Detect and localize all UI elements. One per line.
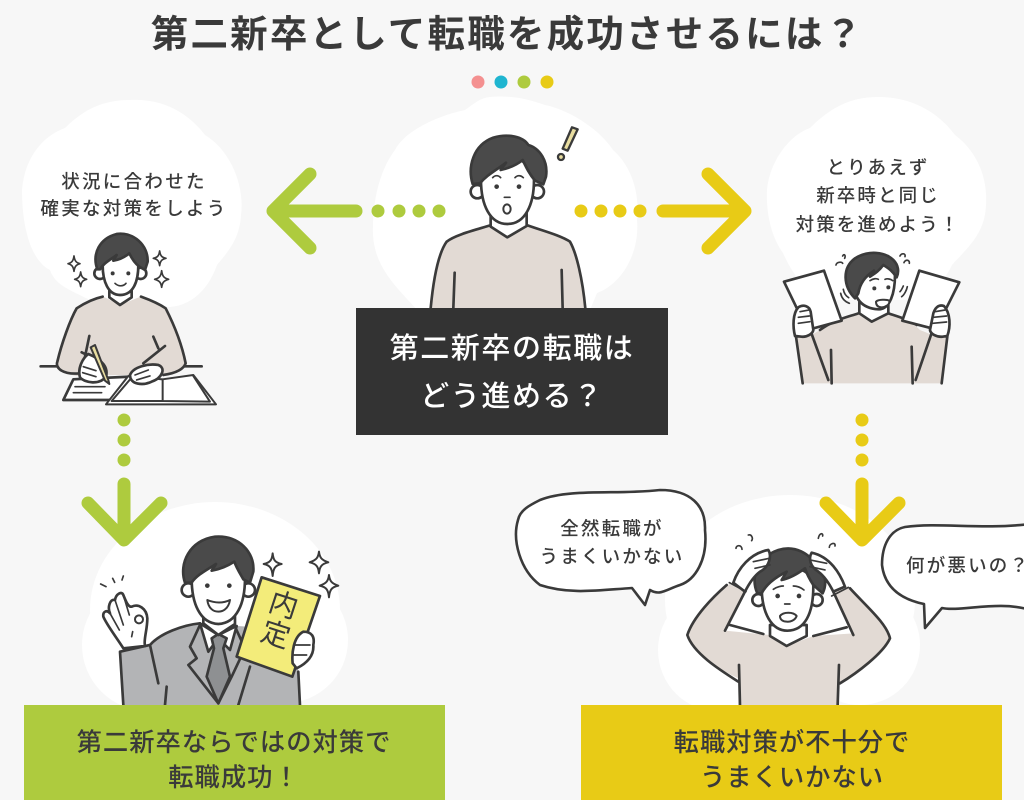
conclusion box: success: 転職成功！	[168, 764, 300, 792]
icon: exclamation mark	[558, 127, 578, 160]
cloud: center	[373, 97, 638, 310]
heading box: center question: どう進める？	[420, 380, 604, 413]
left downward dotted connector	[118, 414, 130, 466]
heading box: center question: 第二新卒の転職は	[390, 332, 634, 365]
speech bubble: left: うまくいかない	[540, 546, 684, 567]
conclusion box: failure: うまくいかない	[700, 764, 884, 792]
cloud: bottom left	[82, 502, 348, 718]
person: bottom right holding head	[687, 534, 890, 705]
heading box: center question	[356, 308, 668, 435]
person: bottom left with job offer	[101, 537, 338, 705]
text: left thought: 確実な対策をしよう	[40, 198, 228, 219]
icon: sparkles	[264, 552, 338, 597]
icon: OK hand	[101, 576, 147, 648]
arrow: down left	[88, 484, 161, 540]
cloud: bottom right	[658, 495, 920, 712]
title accent dots	[472, 76, 554, 88]
person: right panicking with papers	[784, 253, 959, 383]
cloud: right	[767, 97, 986, 300]
arrow: to left	[273, 174, 356, 248]
paper: job offer	[237, 577, 320, 677]
left dotted connector	[372, 204, 446, 218]
conclusion box: failure: 転職対策が不十分で	[674, 729, 910, 757]
speech bubble: left	[516, 490, 705, 605]
right dotted connector	[574, 204, 646, 218]
person: center surprised	[431, 127, 585, 308]
conclusion box: success	[24, 705, 445, 800]
arrow: down right	[826, 484, 899, 540]
title: 第二新卒として転職を成功させるには？	[151, 13, 864, 55]
text: right thought: 対策を進めよう！	[796, 214, 960, 235]
text: right thought: 新卒時と同じ	[816, 185, 940, 206]
conclusion box: success: 第二新卒ならではの対策で	[77, 729, 391, 757]
speech bubble: left: 全然転職が	[560, 518, 664, 539]
text: left thought	[40, 171, 228, 219]
paper: job offer: 定	[257, 616, 294, 655]
paper: job offer: 内	[265, 586, 302, 625]
right downward dotted connector	[856, 414, 868, 466]
icon: sparkles	[68, 251, 169, 287]
conclusion box: failure	[581, 705, 1002, 800]
text: right thought: とりあえず	[826, 157, 930, 178]
arrow: to right	[663, 174, 745, 248]
speech bubble: right	[882, 524, 1024, 628]
text: left thought: 状況に合わせた	[61, 171, 207, 192]
person: left studying at desk	[41, 234, 216, 404]
cloud: left	[22, 100, 242, 307]
text: right thought	[796, 157, 960, 235]
